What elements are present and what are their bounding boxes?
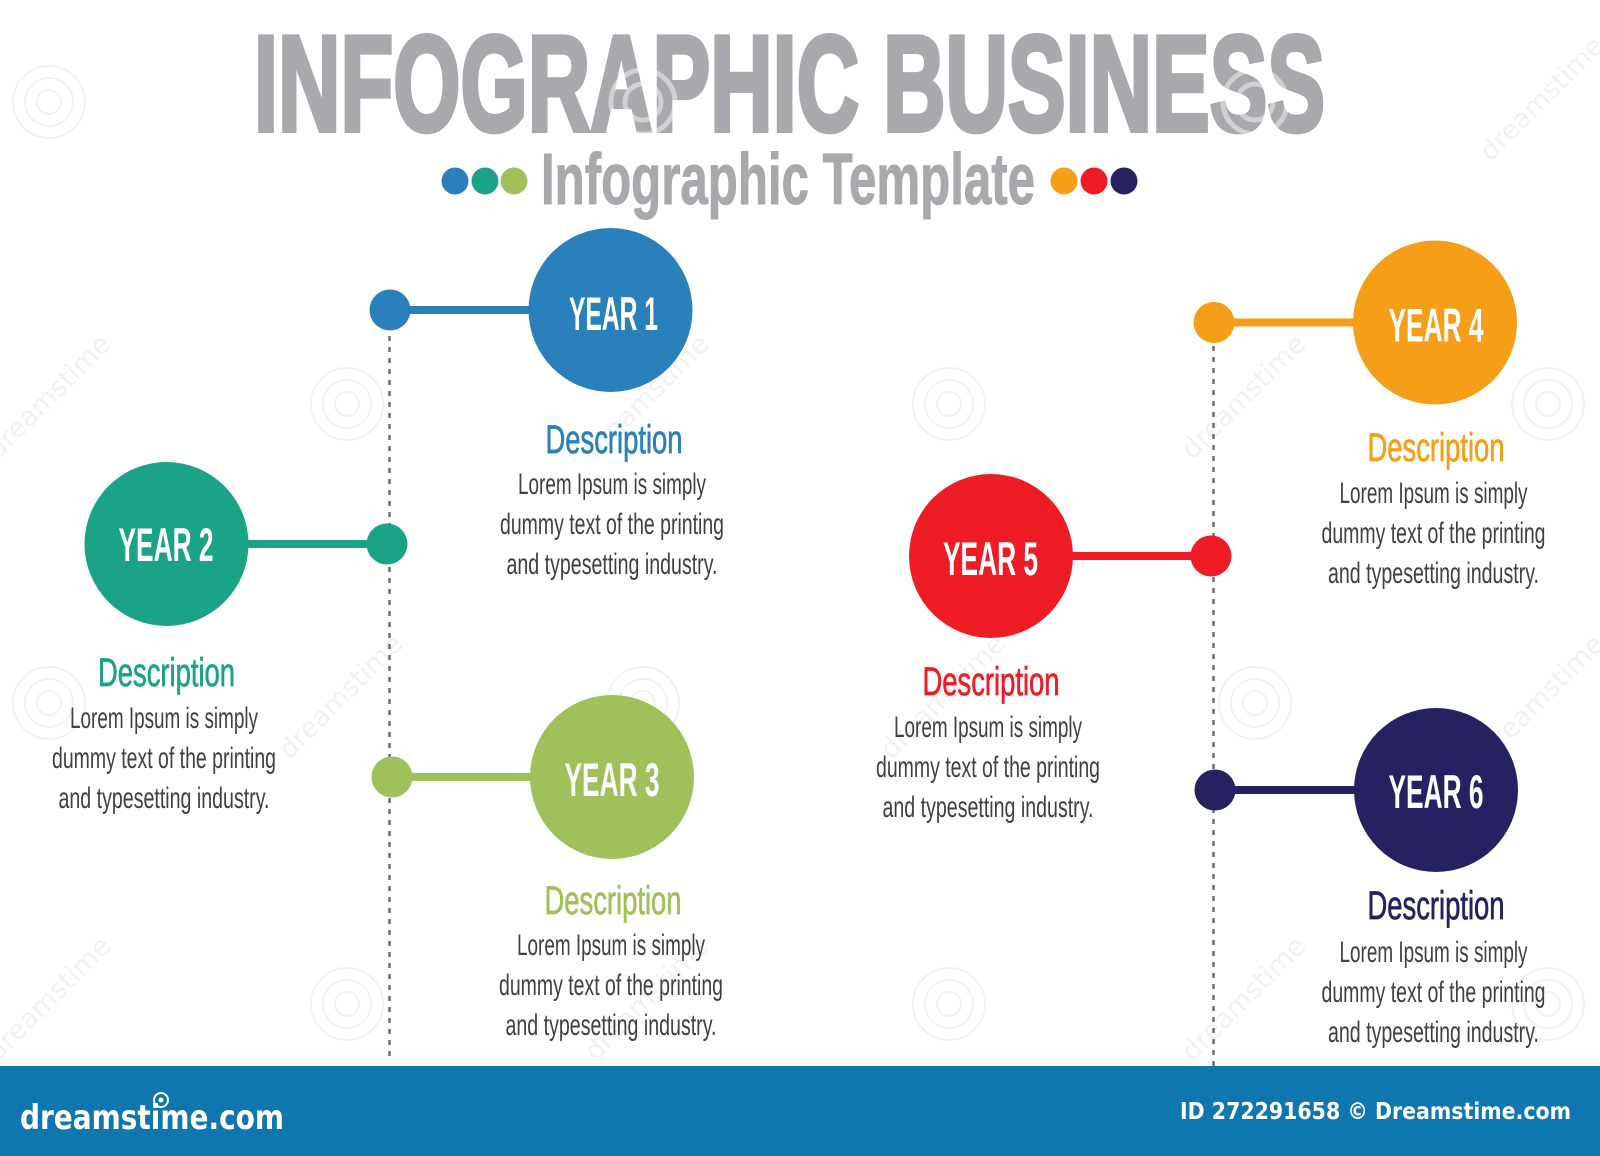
year 5 circle	[909, 474, 1073, 638]
year 5 body: dummy text of the printing	[876, 751, 1100, 784]
text: dreamstime	[579, 931, 715, 1067]
year 2 label: YEAR 2	[118, 518, 214, 571]
year 3 body: dummy text of the printing	[499, 969, 723, 1002]
year 5 heading: Description	[922, 660, 1060, 704]
text: dreamstime	[273, 629, 409, 765]
year 6 circle	[1354, 708, 1518, 872]
year 1 body: and typesetting industry.	[506, 548, 718, 581]
year 1 heading: Description	[546, 418, 682, 462]
year 1 body: Lorem Ipsum is simply	[518, 468, 706, 501]
year 3 circle	[530, 695, 694, 859]
year 5 body	[876, 711, 1100, 824]
year 2 body: Lorem Ipsum is simply	[70, 702, 258, 735]
year 3 label: YEAR 3	[564, 753, 660, 806]
year 2 connector	[166, 524, 408, 564]
year 2 body	[52, 702, 276, 815]
year 4 body	[1322, 477, 1546, 590]
panel: year 6	[1194, 708, 1546, 1049]
text: dreamstime	[875, 629, 1011, 765]
year 6 body	[1322, 936, 1546, 1049]
panel: year 5	[876, 474, 1232, 824]
year 2 circle	[84, 462, 248, 626]
watermark over title	[611, 70, 1287, 134]
year 1 label: YEAR 1	[569, 287, 658, 340]
year 5 body: and typesetting industry.	[882, 791, 1094, 824]
text: dreamstime	[1176, 329, 1312, 465]
year 2 body: and typesetting industry.	[58, 782, 270, 815]
year 4 heading: Description	[1368, 426, 1504, 470]
year 2 body: dummy text of the printing	[52, 742, 276, 775]
footer bar	[0, 1066, 1600, 1156]
right timeline dotted line	[1212, 335, 1215, 1066]
year 3 body	[499, 929, 723, 1042]
panel: year 1	[370, 228, 724, 581]
panel: year 4	[1194, 240, 1546, 590]
footer logo: dreamstime.com	[20, 1098, 284, 1138]
panel: year 2	[52, 462, 408, 815]
year 3 body: Lorem Ipsum is simply	[517, 929, 705, 962]
right colour dots	[1050, 168, 1138, 194]
year 2 heading: Description	[98, 651, 235, 695]
year 3 body: and typesetting industry.	[506, 1009, 716, 1042]
left timeline dotted line	[388, 325, 391, 1056]
left colour dots	[442, 168, 528, 194]
year 1 body: dummy text of the printing	[500, 508, 724, 541]
text: dreamstime	[1176, 931, 1312, 1067]
year 3 connector	[372, 756, 612, 798]
year 6 label: YEAR 6	[1388, 765, 1484, 818]
year 4 label: YEAR 4	[1388, 298, 1484, 352]
subtitle	[442, 140, 1138, 220]
year 1 body	[500, 468, 724, 581]
year 1 circle	[528, 228, 692, 392]
year 6 connector	[1194, 770, 1436, 810]
year 5 body: Lorem Ipsum is simply	[894, 711, 1082, 744]
subtitle text: Infographic Template	[541, 140, 1035, 220]
panel: year 3	[372, 695, 723, 1042]
text: dreamstime	[579, 329, 715, 465]
year 1 connector	[370, 290, 610, 330]
year 5 connector	[991, 536, 1232, 576]
year 6 heading: Description	[1368, 884, 1504, 928]
year 5 label: YEAR 5	[943, 532, 1038, 585]
year 4 connector	[1194, 302, 1435, 343]
year 4 circle	[1353, 240, 1517, 404]
year 3 heading: Description	[544, 879, 682, 923]
